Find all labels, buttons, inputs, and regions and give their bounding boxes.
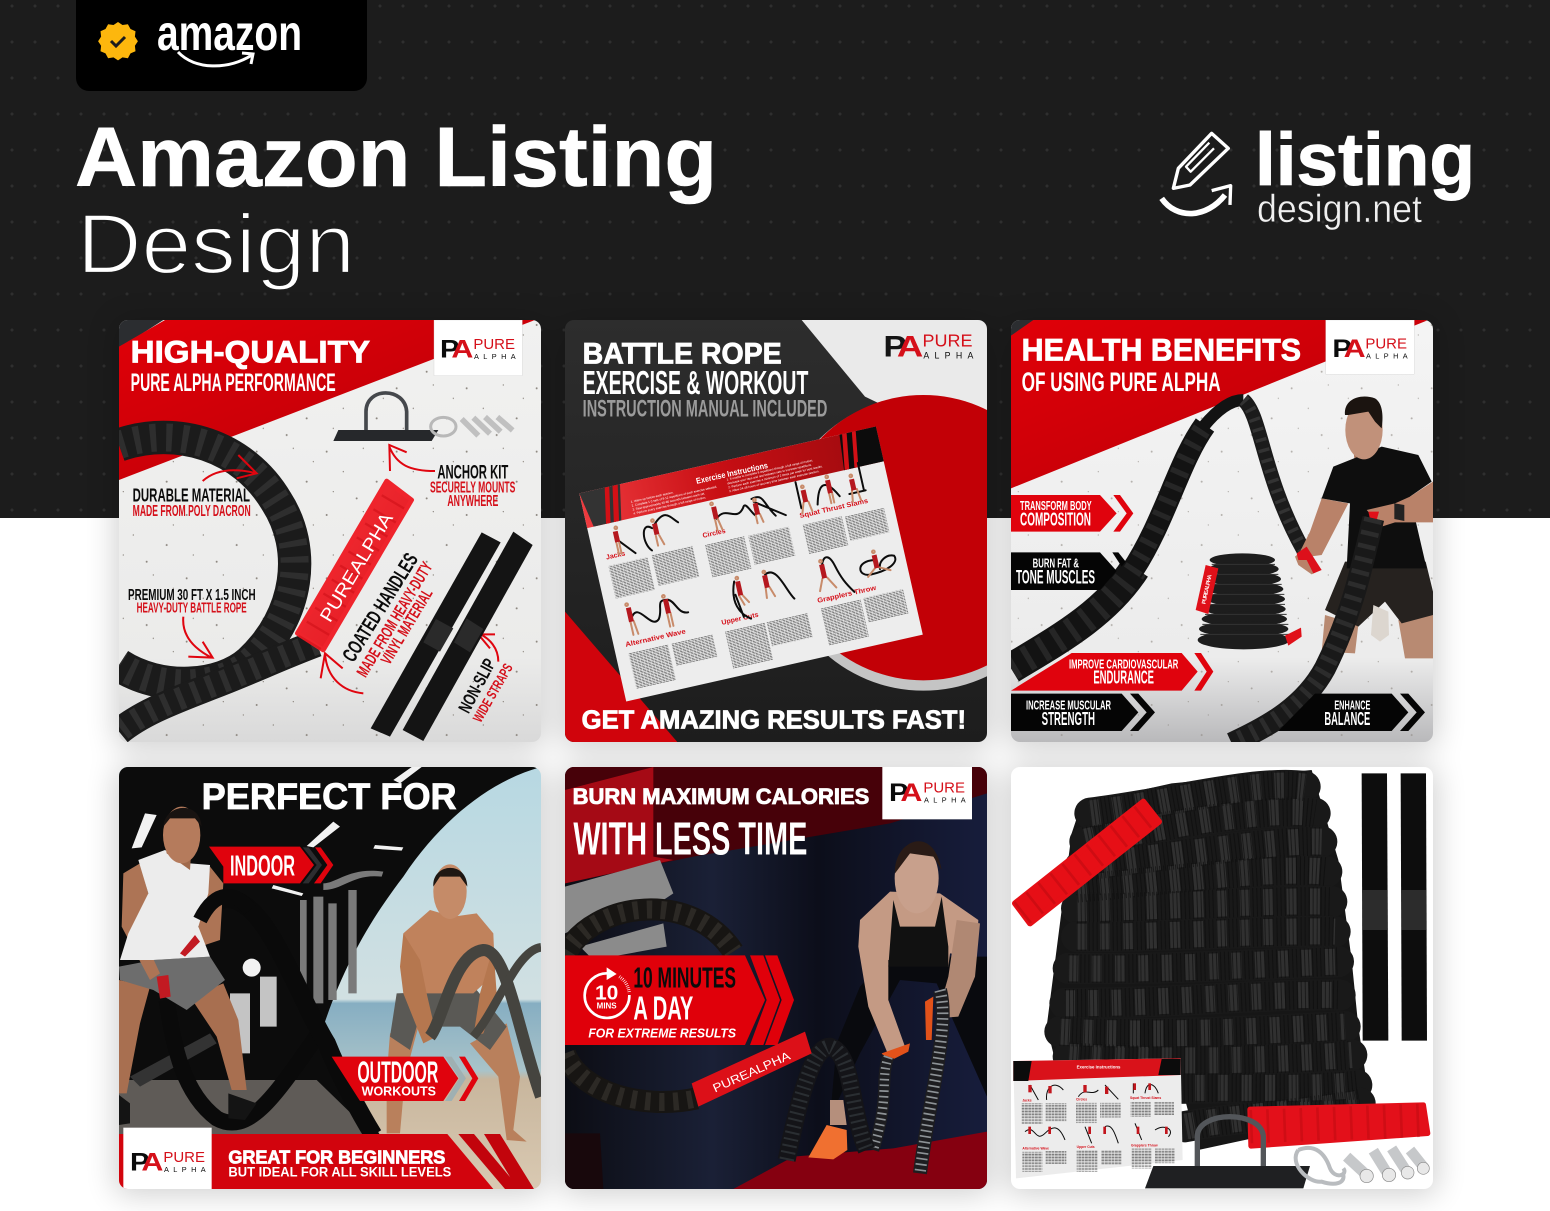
- label: non-slip straps: WIDE STRAPS: [469, 661, 516, 725]
- banner: indoor: INDOOR: [230, 851, 295, 883]
- banner: increase muscular strength: INCREASE MUSCULAR: [1026, 698, 1111, 712]
- icon: 10 minute timer: 10: [595, 981, 618, 1004]
- icon: amazon smile: [178, 52, 253, 66]
- logo box: ALPHA: [924, 795, 966, 804]
- arrow: straps: [478, 633, 498, 662]
- anchor kit hardware: [333, 393, 513, 441]
- exercise manual: [1013, 1058, 1183, 1178]
- red rope handle: PUREALPHA: [315, 508, 397, 625]
- label: non-slip straps: [458, 658, 512, 722]
- subheading: WITH LESS TIME: [573, 812, 807, 864]
- heading: HIGH-QUALITY: [131, 335, 370, 370]
- label: coated handles: COATED HANDLES: [338, 549, 423, 666]
- battle rope waves: [1011, 400, 1303, 668]
- banner: 10 minutes a day: 10 MINUTES: [633, 962, 736, 994]
- exercise manual: Jacks: [1022, 1098, 1032, 1102]
- exercise titles: Alternative Wave: [625, 628, 687, 649]
- woman with battle ropes: [787, 841, 987, 1173]
- icon: 10 minute timer: MINS: [597, 1001, 617, 1010]
- man with battle rope: [1295, 396, 1433, 658]
- banner: 10 minutes a day: [565, 955, 794, 1045]
- wordmark: design.net: design.net: [1257, 188, 1422, 231]
- exercise manual: Circles: [1076, 1098, 1087, 1102]
- exercise manual: Grapplers Throw: [1131, 1144, 1158, 1148]
- logo box: ALPHA: [164, 1165, 206, 1174]
- logo box: [434, 320, 522, 376]
- logo: listing design.net: [1162, 118, 1475, 231]
- banner: improve cardiovascular endurance: ENDURANCE: [1093, 667, 1154, 688]
- logo box: ALPHA: [1366, 351, 1408, 360]
- manual instructions: 3. Allow 24-48 hours of recovery time between each exercise session.: [729, 469, 820, 493]
- call to action: GET AMAZING RESULTS FAST!: [582, 704, 966, 734]
- logo box: [123, 1128, 212, 1191]
- label: coated handles: VINYL MATERIAL: [378, 586, 437, 668]
- exercise titles: Jacks: [605, 550, 626, 562]
- subheading: exercise and workout: EXERCISE & WORKOUT: [583, 365, 808, 402]
- label: non-slip straps: NON-SLIP: [455, 655, 500, 716]
- panel: burn maximum calories: [565, 765, 987, 1189]
- logo box: A: [900, 780, 923, 807]
- label: coated handles: MADE FROM HEAVY-DUTY: [353, 559, 436, 680]
- exercise manual: Upper Cuts: [1077, 1145, 1095, 1149]
- exercise figures: [606, 460, 901, 645]
- banner: transform body composition: TRANSFORM BODY: [1020, 498, 1092, 513]
- logo box: [1326, 320, 1414, 374]
- exercise manual: Alternative Wave: [1022, 1146, 1049, 1150]
- label: premium rope: PREMIUM 30 FT X 1.5 INCH: [128, 587, 256, 604]
- red circle: [818, 395, 987, 691]
- logo box: A: [141, 1150, 164, 1177]
- banner: outdoor workouts: OUTDOOR: [357, 1056, 438, 1090]
- logo box: PURE: [923, 780, 965, 796]
- exercise manual: Squat Thrust Slams: [1130, 1096, 1161, 1100]
- banner: enhance balance: [1278, 694, 1425, 731]
- panel: high-quality product features: [119, 320, 541, 742]
- logo box: PURE: [1365, 336, 1407, 352]
- rope coil: [119, 437, 317, 732]
- label: anchor kit: [430, 465, 515, 506]
- manual instructions: 1. If unable to complete 8 repetitions through a full range of motion,: [726, 458, 814, 482]
- logo: P: [883, 331, 907, 364]
- arrow: premium rope: [183, 617, 213, 658]
- logo: A: [897, 331, 923, 364]
- heading: PERFECT FOR: [202, 775, 457, 817]
- logo box: A: [1344, 336, 1366, 363]
- logo box: P: [130, 1150, 149, 1177]
- black rope cross: [167, 899, 373, 1135]
- subheading: OF USING PURE ALPHA: [1022, 367, 1221, 397]
- red handle upper: [1015, 802, 1159, 923]
- banner: outdoor workouts: [332, 1056, 478, 1101]
- bottom banner: GREAT FOR BEGINNERS: [228, 1146, 445, 1167]
- manual instructions: [630, 456, 824, 516]
- panel: product kit contents: [1011, 767, 1433, 1189]
- arrow: coated handles: [321, 653, 363, 693]
- panel: health benefits: [1011, 320, 1433, 743]
- manual instructions: 2. Complete 1-3 sets of 8-12 repetitions of each exercise selected.: [631, 485, 718, 508]
- banner: indoor: [209, 847, 333, 883]
- bottom banner: BUT IDEAL FOR ALL SKILL LEVELS: [228, 1164, 451, 1180]
- icon: 10 minute timer: [585, 967, 629, 1018]
- banner: increase muscular strength: STRENGTH: [1042, 708, 1095, 729]
- outdoor athlete: [387, 864, 541, 1142]
- wide straps: [371, 532, 533, 741]
- coiled rope: [1196, 553, 1302, 649]
- label: durable material: DURABLE MATERIAL: [133, 485, 250, 506]
- label: premium rope: [128, 589, 255, 612]
- logo box: [882, 765, 972, 819]
- logo box: P: [440, 337, 459, 364]
- red rope handle: [692, 1032, 812, 1107]
- banner: enhance balance: BALANCE: [1324, 708, 1370, 729]
- manual instructions: 1. Warm up before each session.: [630, 490, 674, 504]
- bottom banner: [119, 1134, 534, 1189]
- anchor kit hardware: [1145, 1117, 1429, 1188]
- gym background: [119, 767, 541, 1135]
- label: anchor kit: SECURELY MOUNTS: [430, 479, 515, 496]
- manual instructions: 4. Perform every exercise through a full range of motion.: [633, 495, 707, 516]
- banner: increase muscular strength: [1011, 694, 1155, 731]
- heading: BURN MAXIMUM CALORIES: [573, 784, 869, 809]
- banner: 10 minutes a day: A DAY: [633, 990, 693, 1027]
- amazon badge: [76, 0, 367, 91]
- manual heading: Exercise Instructions: [695, 460, 769, 486]
- panel: battle rope exercise manual: [565, 320, 987, 742]
- logo box: A: [451, 337, 474, 364]
- logo box: P: [1332, 336, 1352, 363]
- wordmark: listing: listing: [1255, 118, 1475, 201]
- logo: PURE: [923, 330, 973, 350]
- banner: transform body composition: [1011, 495, 1133, 532]
- subheading: manual included: INSTRUCTION MANUAL INCLUDED: [583, 396, 827, 423]
- logo box: PURE: [163, 1150, 205, 1166]
- heading: HEALTH BENEFITS: [1022, 333, 1301, 368]
- exercise titles: Squat Thrust Slams: [799, 498, 869, 520]
- logo box: ALPHA: [474, 352, 516, 361]
- logo box: P: [889, 780, 908, 807]
- title: Design: Design: [77, 197, 355, 291]
- manual instructions: 3. Rest approximately 30-90 seconds between each set.: [632, 491, 706, 512]
- title: Amazon Listing: Amazon Listing: [75, 110, 717, 204]
- coiled rope: PUREALPHA: [1201, 574, 1214, 605]
- exercise titles: Circles: [702, 528, 726, 540]
- banner: improve cardiovascular endurance: [1011, 653, 1213, 691]
- red rope handle: [297, 481, 412, 650]
- icon: verified seal: [98, 22, 138, 60]
- label: anchor kit: ANCHOR KIT: [437, 462, 508, 483]
- banner: burn fat tone muscles: TONE MUSCLES: [1016, 567, 1095, 588]
- banner: 10 minutes a day: FOR EXTREME RESULTS: [588, 1027, 737, 1041]
- logo box: PURE: [473, 337, 515, 353]
- coiled black rope: [1047, 770, 1368, 1150]
- icon: pencil with swoosh: [1162, 133, 1231, 214]
- manual heading: Exercise Instructions: [1077, 1064, 1121, 1069]
- banner: enhance balance: ENHANCE: [1334, 698, 1370, 712]
- logo: [886, 334, 974, 358]
- banner: burn fat tone muscles: BURN FAT &: [1033, 557, 1079, 571]
- panel: perfect for indoor and outdoor: [119, 767, 541, 1191]
- straps: [1362, 773, 1427, 1041]
- label: anchor kit: ANYWHERE: [447, 493, 498, 510]
- red handle lower: [1250, 1105, 1428, 1146]
- subheading: PURE ALPHA PERFORMANCE: [131, 370, 336, 397]
- foreground rope: [1232, 518, 1373, 743]
- label: coated handles: [343, 553, 433, 678]
- banner: improve cardiovascular endurance: IMPROVE CARDIOVASCULAR: [1069, 657, 1178, 671]
- indoor athlete: [119, 807, 257, 1125]
- logo: ALPHA: [923, 350, 973, 360]
- rope ring: [565, 909, 733, 1102]
- red rope handle: PUREALPHA: [711, 1049, 792, 1095]
- manual instructions: 2. Perform each exercise a minimum of 2 times per week for best results.: [728, 464, 823, 489]
- exercise titles: [605, 496, 888, 649]
- banner: burn fat tone muscles: [1011, 552, 1126, 590]
- amazon wordmark: amazon: [157, 5, 302, 61]
- label: premium rope: HEAVY-DUTY BATTLE ROPE: [137, 600, 247, 616]
- manual instructions: decrease your reps and rest between sets to increase repetitions.: [727, 463, 812, 485]
- exercise titles: Grapplers Throw: [817, 585, 877, 605]
- label: durable material: [133, 488, 250, 516]
- banner: transform body composition: COMPOSITION: [1020, 509, 1091, 530]
- label: durable material: MADE FROM POLY DACRON: [133, 503, 251, 520]
- exercise titles: Upper Cuts: [721, 612, 759, 627]
- heading: battle rope: BATTLE ROPE: [583, 337, 782, 370]
- arrow: durable material: [203, 455, 257, 481]
- banner: outdoor workouts: WORKOUTS: [362, 1084, 436, 1099]
- arrow: anchor kit: [389, 445, 435, 471]
- exercise manual sheet: [579, 426, 923, 701]
